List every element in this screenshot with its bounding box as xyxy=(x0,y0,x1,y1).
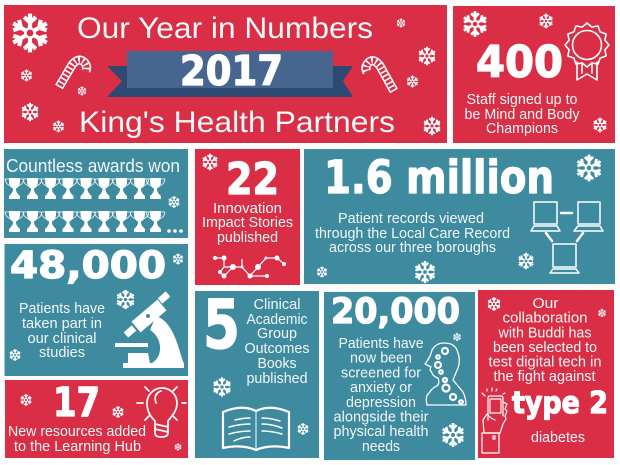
text: records description: through the Local Care Record xyxy=(315,225,510,242)
number: 20,000: 20,000 xyxy=(331,292,460,332)
text: learning hub description: New resources added xyxy=(8,424,146,440)
icon: snowflake xyxy=(174,443,182,451)
text: screening description: alongside their xyxy=(334,410,429,426)
text: Buddi collaboration description: with Buddi has xyxy=(498,325,592,341)
text: clinical studies description xyxy=(19,301,105,361)
text: staff description: Staff signed up to xyxy=(466,92,578,108)
text: screening description: depression xyxy=(346,395,416,411)
panel: 400 staff xyxy=(453,6,615,143)
icon: snowflake xyxy=(21,103,39,121)
icon: snowflake xyxy=(9,349,21,361)
icon: snowflake xyxy=(20,70,33,81)
icon: snowflake xyxy=(575,155,603,181)
icon: snowflake xyxy=(316,266,328,278)
icon: snowflake xyxy=(418,47,436,65)
text: clinical studies description: Patients have xyxy=(19,301,105,317)
text: innovation description: published xyxy=(217,230,278,246)
icon: snowflake xyxy=(487,297,501,311)
panel: 22 innovation stories xyxy=(195,149,300,285)
panel: 5 outcomes books xyxy=(195,286,319,458)
panel: 1.6 million records xyxy=(304,149,615,284)
text: screening description: anxiety or xyxy=(350,380,412,396)
heading: Our Year in Numbers: Our Year in Numbers xyxy=(77,12,373,45)
icon: snowflake xyxy=(423,117,441,135)
icon: snowflake xyxy=(396,18,406,28)
text: innovation description: Impact Stories xyxy=(202,215,293,231)
icon: hand holding phone xyxy=(482,388,507,453)
number: 22: 22 xyxy=(226,154,279,205)
text: outcomes books description: published xyxy=(246,371,308,387)
icons: trophies row two xyxy=(5,211,165,232)
text: learning hub description xyxy=(8,424,146,455)
number: 17: 17 xyxy=(53,380,100,426)
icon: molecule network xyxy=(213,256,286,278)
icon: snowflake xyxy=(462,11,488,37)
text: screening description: now been xyxy=(350,351,412,367)
text: outcomes books description: Clinical xyxy=(254,297,300,313)
icon: snowflake xyxy=(77,86,87,96)
icon: rosette badge xyxy=(565,23,609,80)
icon: open book xyxy=(223,408,289,450)
number: 1.6 million: 1.6 million xyxy=(324,151,554,204)
text: screening description: physical health xyxy=(334,424,428,440)
icon: snowflake xyxy=(202,154,218,170)
text: screening description: screened for xyxy=(341,365,421,381)
text: staff description xyxy=(464,92,580,137)
icon: snowflake xyxy=(453,333,461,341)
text: screening description xyxy=(334,336,429,455)
number: 5: 5 xyxy=(203,286,240,365)
text: Buddi collaboration description: been selected to xyxy=(493,340,597,356)
text: screening description: needs xyxy=(362,439,400,455)
panel: Buddi type 2 xyxy=(478,290,614,458)
text: outcomes books description xyxy=(244,297,310,387)
text: innovation description: Innovation xyxy=(213,201,282,217)
icon: snowflake xyxy=(212,377,232,397)
icon: snowflake xyxy=(168,196,180,208)
text: records description: Patient records viewed xyxy=(338,210,484,227)
number: 400: 400 xyxy=(476,37,563,88)
text: Buddi collaboration description xyxy=(488,296,602,385)
ribbon with year: 2017 xyxy=(180,47,283,95)
icon: microscope xyxy=(115,294,184,368)
text: diabetes: diabetes xyxy=(531,430,585,446)
text: records description xyxy=(315,210,510,256)
icon: snowflake xyxy=(116,290,135,309)
icon: snowflake xyxy=(518,253,534,269)
text: innovation description xyxy=(202,201,293,246)
icon: light bulb xyxy=(137,387,186,437)
icon: candy cane right xyxy=(366,61,394,91)
icon: candy cane left xyxy=(59,60,87,87)
text: clinical studies description: our clinical xyxy=(28,331,96,347)
icon: snowflake xyxy=(441,423,465,447)
icon: snowflake xyxy=(297,423,309,435)
text: learning hub description: to the Learning Hub xyxy=(14,439,141,455)
icon: snowflake xyxy=(406,76,419,87)
text: clinical studies description: taken part in xyxy=(22,316,102,332)
icon: head and spine gears xyxy=(425,343,466,405)
icon: snowflake xyxy=(414,261,436,283)
text: outcomes books description: Outcomes xyxy=(244,341,310,357)
icon: snowflake large xyxy=(10,14,50,52)
icon: snowflake xyxy=(539,14,553,28)
text: records description: across our three boroughs xyxy=(329,239,496,256)
ellipsis dots xyxy=(167,229,183,233)
text: screening description: Patients have xyxy=(338,336,424,352)
panel: 48,000 patients xyxy=(4,244,188,376)
text: staff description: be Mind and Body xyxy=(464,107,580,123)
number: type 2: type 2 xyxy=(512,386,608,421)
icon: snowflake xyxy=(172,253,184,265)
icon: snowflake xyxy=(52,121,65,132)
icon: snowflake xyxy=(112,406,124,418)
icon: connected laptops xyxy=(531,202,603,273)
text: outcomes books description: Group xyxy=(257,326,297,342)
heading: Countless awards won: Countless awards won xyxy=(6,155,180,176)
text: Buddi collaboration description: Our xyxy=(532,296,559,312)
icon: snowflake xyxy=(593,118,607,132)
panel: title banner xyxy=(4,5,447,143)
text: staff description: Champions xyxy=(486,121,558,137)
number: 48,000: 48,000 xyxy=(10,244,166,287)
icon: snowflake xyxy=(598,309,606,317)
ribbon with year xyxy=(107,47,353,97)
text: outcomes books description: Academic xyxy=(246,312,308,328)
panel: 20,000 screened xyxy=(324,292,475,460)
text: outcomes books description: Books xyxy=(258,356,296,372)
text: Buddi collaboration description: test digital tech in xyxy=(488,355,602,371)
text: Buddi collaboration description: the fight against xyxy=(494,369,596,385)
text: clinical studies description: studies xyxy=(39,345,85,361)
icons: trophies row one xyxy=(5,178,165,199)
text: Buddi collaboration description: collaboration xyxy=(502,311,588,327)
heading: King's Health Partners: King's Health Partners xyxy=(79,106,395,139)
icon: snowflake xyxy=(20,394,32,406)
panel: 17 resources xyxy=(5,380,188,458)
panel: countless awards xyxy=(4,149,188,238)
